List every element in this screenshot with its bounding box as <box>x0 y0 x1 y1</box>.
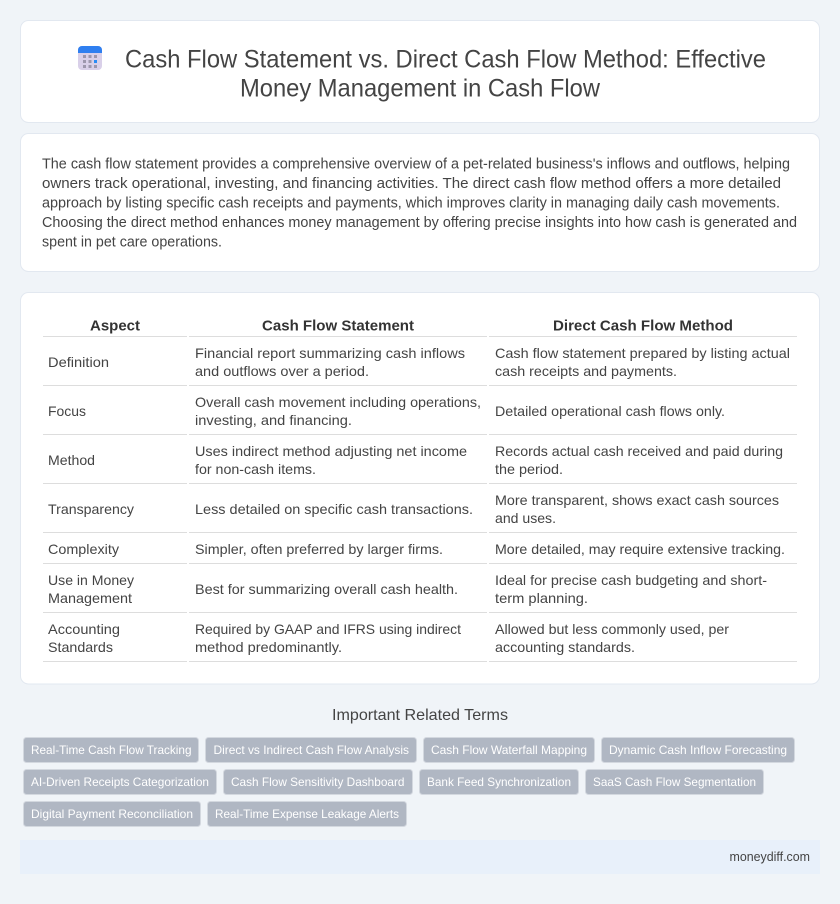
tag <box>602 738 794 762</box>
intro text block: approach by listing specific cash receipts and payments, which improves clarity in managing daily cash movements. <box>42 196 780 212</box>
row: accounting standards: Allowed but less commonly used, per <box>495 621 729 637</box>
panel: introduction <box>20 134 820 272</box>
footer <box>20 840 820 874</box>
row: use in money management: term planning. <box>495 590 588 606</box>
row: complexity: Complexity <box>48 541 119 557</box>
title <box>125 46 766 102</box>
tag: Cash Flow Waterfall Mapping <box>431 743 587 757</box>
tag: Bank Feed Synchronization <box>427 775 571 789</box>
row: focus: investing, and financing. <box>195 412 352 428</box>
row: focus: Focus <box>48 403 86 419</box>
row: transparency: More transparent, shows exact cash sources <box>495 492 779 508</box>
table header row <box>90 318 733 334</box>
row: accounting standards: accounting standards. <box>495 639 635 655</box>
row: focus <box>48 394 725 428</box>
row: method <box>48 443 783 477</box>
intro text block: Choosing the direct method enhances money management by offering precise insights into how cash is generated and <box>42 215 797 231</box>
row: transparency: Transparency <box>48 501 134 517</box>
tag <box>24 770 216 794</box>
tag <box>224 770 412 794</box>
heading: important related terms: Important Related Terms <box>332 707 508 724</box>
table header row: Direct Cash Flow Method <box>553 318 733 334</box>
tag: Cash Flow Sensitivity Dashboard <box>231 775 404 789</box>
row: complexity: Simpler, often preferred by larger firms. <box>195 541 443 557</box>
title: Money Management in Cash Flow <box>240 74 601 102</box>
tag: AI-Driven Receipts Categorization <box>31 775 209 789</box>
intro text block <box>42 156 797 250</box>
row: method: for non-cash items. <box>195 461 316 477</box>
row: accounting standards: Required by GAAP and IFRS using indirect <box>195 621 461 637</box>
row: use in money management: Ideal for precise cash budgeting and short- <box>495 572 767 588</box>
tag: Direct vs Indirect Cash Flow Analysis <box>214 743 409 757</box>
row: method: Uses indirect method adjusting net income <box>195 443 467 459</box>
row: accounting standards: Standards <box>48 639 113 655</box>
tag <box>586 770 764 794</box>
tag: SaaS Cash Flow Segmentation <box>593 775 756 789</box>
row: focus: Overall cash movement including operations, <box>195 394 481 410</box>
panel: title card <box>20 20 820 122</box>
tag <box>206 738 416 762</box>
panel: related term tags <box>24 738 794 826</box>
row: use in money management <box>48 572 767 606</box>
intro text block: spent in pet care operations. <box>42 234 222 250</box>
row: definition: Financial report summarizing cash inflows <box>195 345 465 361</box>
row: use in money management: Use in Money <box>48 572 134 588</box>
row: definition <box>48 345 790 379</box>
tag: Real-Time Expense Leakage Alerts <box>215 807 399 821</box>
tag <box>24 802 200 826</box>
row: accounting standards: method predominantly. <box>195 639 342 655</box>
tag: Digital Payment Reconciliation <box>31 807 193 821</box>
row: transparency: and uses. <box>495 510 556 526</box>
row: definition: cash receipts and payments. <box>495 363 677 379</box>
table header row: Cash Flow Statement <box>262 318 414 334</box>
tag: Real-Time Cash Flow Tracking <box>31 743 192 757</box>
row: accounting standards: Accounting <box>48 621 120 637</box>
row: focus: Detailed operational cash flows only. <box>495 403 725 419</box>
row: definition: Cash flow statement prepared by listing actual <box>495 345 790 361</box>
row: use in money management: Management <box>48 590 132 606</box>
row: complexity <box>48 541 785 557</box>
footer: moneydiff.com <box>730 849 810 864</box>
tag <box>420 770 578 794</box>
row: method: Method <box>48 452 95 468</box>
tag <box>24 738 198 762</box>
row: transparency: Less detailed on specific cash transactions. <box>195 501 473 517</box>
row: transparency <box>48 492 779 526</box>
row: definition: Definition <box>48 354 109 370</box>
icon: calendar <box>78 46 102 70</box>
intro text block: The cash flow statement provides a comprehensive overview of a pet-related business's inflows and outflows, helping <box>42 156 790 172</box>
row: definition: and outflows over a period. <box>195 363 369 379</box>
table header row: Aspect <box>90 318 140 334</box>
row: complexity: More detailed, may require extensive tracking. <box>495 541 785 557</box>
row: method: Records actual cash received and paid during <box>495 443 783 459</box>
row: accounting standards <box>48 621 729 655</box>
intro text block: owners track operational, investing, and financing activities. The direct cash flow method offers a more detailed <box>42 176 781 192</box>
row: use in money management: Best for summarizing overall cash health. <box>195 581 458 597</box>
tag <box>424 738 594 762</box>
title: Cash Flow Statement vs. Direct Cash Flow Method: Effective <box>125 46 766 74</box>
panel: comparison table <box>20 292 820 684</box>
tag <box>208 802 406 826</box>
row: method: the period. <box>495 461 563 477</box>
tag: Dynamic Cash Inflow Forecasting <box>609 743 787 757</box>
